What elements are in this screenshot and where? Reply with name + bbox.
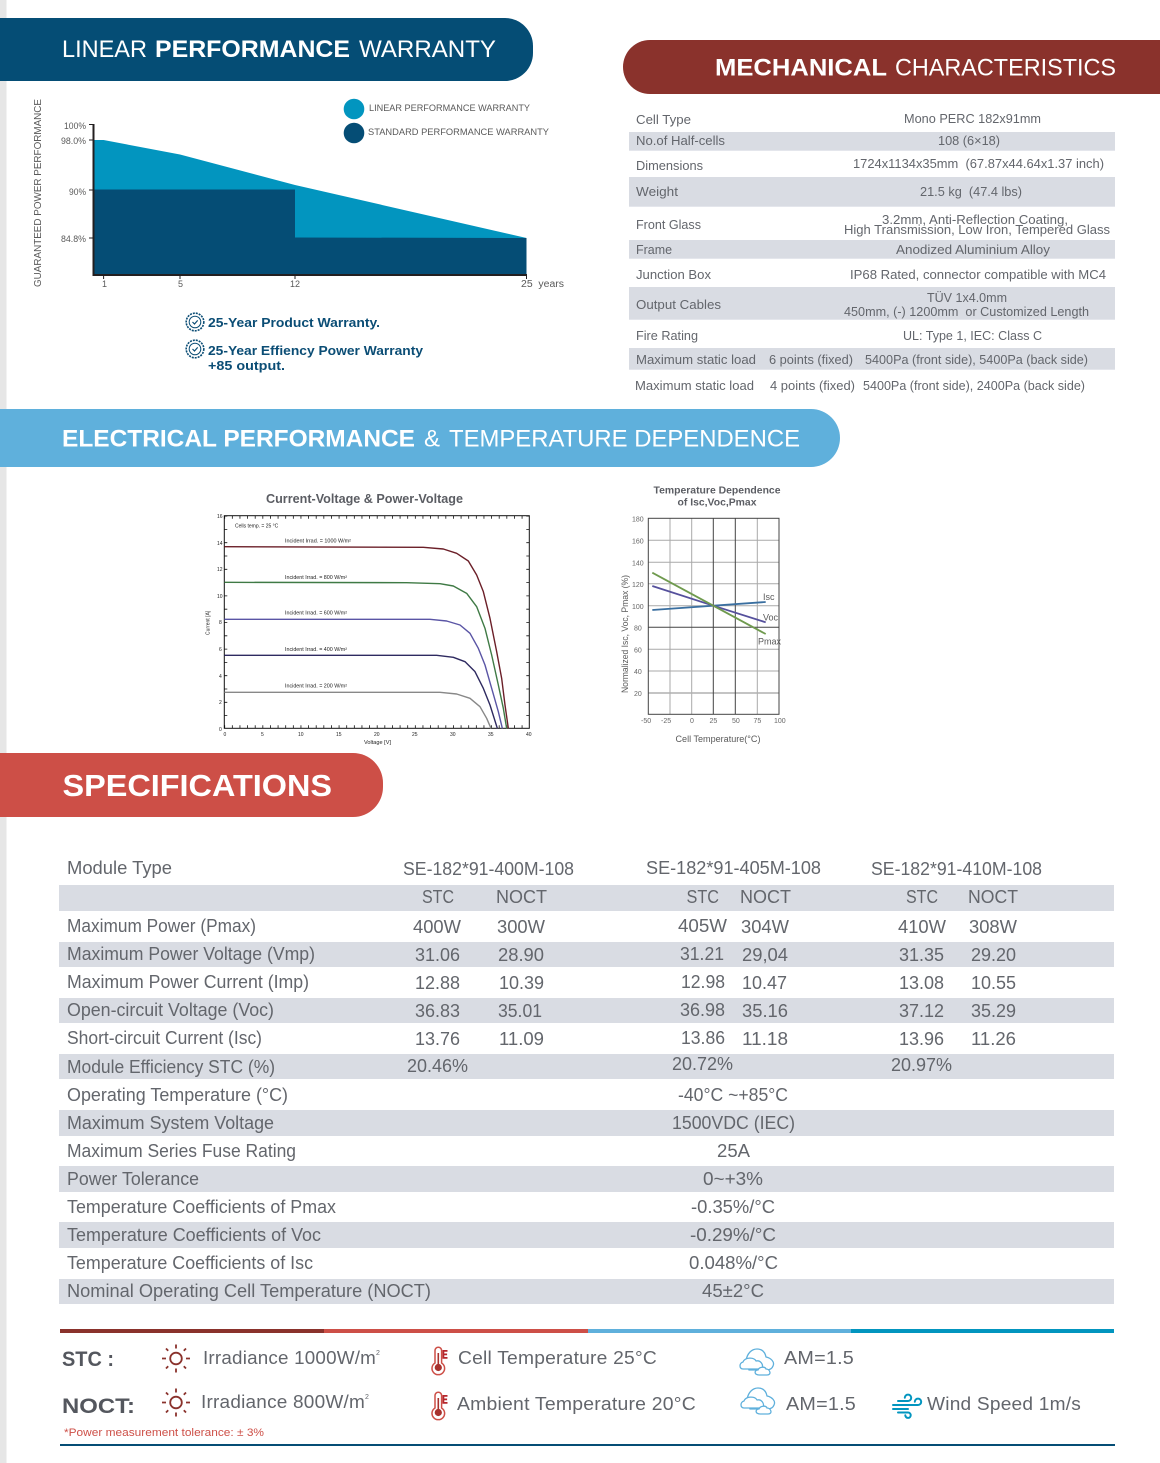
heading: electrical performance and temperature dependence: TEMPERATURE DEPENDENCE <box>449 426 800 452</box>
table: mechanical characteristics: Dimensions <box>636 158 703 173</box>
row: module efficiency: 20.72% <box>672 1054 733 1074</box>
row: short-circuit current: 13.86 <box>681 1028 725 1048</box>
chart: temperature dependence of Isc, Voc, Pmax: Voc <box>763 612 779 622</box>
row: maximum power voltage: 29.20 <box>971 945 1016 965</box>
chart: current-voltage and power-voltage curves: 35 <box>488 732 494 738</box>
row: STC and NOCT column headers: NOCT <box>968 887 1018 907</box>
row: maximum power current: 10.47 <box>742 973 787 993</box>
row: maximum power current <box>67 972 1016 993</box>
row: open-circuit voltage: 36.98 <box>680 1000 725 1020</box>
row: maximum power current: 12.88 <box>415 973 460 993</box>
chart: temperature dependence of Isc, Voc, Pmax: 80 <box>634 626 642 632</box>
chart: linear performance warranty area chart: GUARANTEED POWER PERFORMANCE <box>32 99 44 287</box>
chart: current-voltage and power-voltage curves: 30 <box>450 732 456 738</box>
heading: mechanical characteristics: CHARACTERISTICS <box>895 54 1116 82</box>
warranty notes: +85 output. <box>208 359 285 373</box>
chart: current-voltage and power-voltage curves: Incident Irrad. = 200 W/m² <box>285 684 347 690</box>
row: maximum power: Maximum Power (Pmax) <box>67 916 256 936</box>
table: mechanical characteristics: 3.2mm, Anti-Reflection Coating, <box>882 212 1068 227</box>
row: temperature coefficient of Isc: 0.048%/°C <box>689 1253 778 1273</box>
row: maximum power: 300W <box>497 917 545 937</box>
row: open-circuit voltage: 37.12 <box>899 1001 944 1021</box>
icon: cloud NOCT <box>741 1388 775 1414</box>
chart: temperature dependence of Isc, Voc, Pmax <box>620 484 786 744</box>
chart: temperature dependence of Isc, Voc, Pmax: Cell Temperature(°C) <box>676 734 760 744</box>
table: mechanical characteristics: No.of Half-cells <box>636 133 726 148</box>
chart: temperature dependence of Isc, Voc, Pmax: 140 <box>632 560 644 568</box>
row: short-circuit current: Short-circuit Current (Isc) <box>67 1028 262 1048</box>
chart: temperature dependence of Isc, Voc, Pmax: Pmax <box>758 636 782 646</box>
text: AM NOCT: AM=1.5 <box>786 1394 856 1414</box>
row: short-circuit current: 13.96 <box>899 1029 944 1049</box>
row: maximum power: 410W <box>898 917 946 937</box>
row: module type header: SE-182*91-405M-108 <box>646 858 821 878</box>
chart: linear performance warranty area chart <box>32 99 564 290</box>
chart: temperature dependence of Isc, Voc, Pmax: of Isc,Voc,Pmax <box>678 496 757 508</box>
icon: cloud STC <box>740 1349 774 1375</box>
heading: linear performance warranty: LINEAR <box>62 36 147 63</box>
chart: temperature dependence of Isc, Voc, Pmax: 60 <box>634 648 642 654</box>
warranty notes: 25-Year Effiency Power Warranty <box>208 344 423 358</box>
heading: linear performance warranty: PERFORMANCE <box>155 36 350 63</box>
row: temperature coefficient of Pmax: Temperature Coefficients of Pmax <box>67 1197 336 1217</box>
chart: current-voltage and power-voltage curves: 14 <box>217 541 223 547</box>
legend: warranty types: STANDARD PERFORMANCE WARRANTY <box>368 127 549 137</box>
row: temperature coefficient of Voc: -0.29%/°C <box>690 1225 776 1245</box>
row: maximum power current: 10.55 <box>971 973 1016 993</box>
row: maximum power voltage: 31.21 <box>680 944 724 964</box>
chart: temperature dependence of Isc, Voc, Pmax: 75 <box>754 718 761 725</box>
panel: test conditions footer <box>60 1329 1115 1446</box>
chart: current-voltage and power-voltage curves: 6 <box>219 647 222 653</box>
row: maximum power voltage: 31.06 <box>415 945 460 965</box>
chart: temperature dependence of Isc, Voc, Pmax: 50 <box>732 718 740 725</box>
legend: warranty types: LINEAR PERFORMANCE WARRANTY <box>369 103 530 113</box>
row: module efficiency: 20.46% <box>407 1056 468 1076</box>
row: module type header: SE-182*91-400M-108 <box>403 859 574 879</box>
row: STC and NOCT column headers: STC <box>422 887 454 907</box>
note: power measurement tolerance: *Power measurement tolerance: ± 3% <box>64 1427 264 1439</box>
row: nominal operating cell temperature: 45±2°C <box>702 1281 764 1301</box>
row: maximum system voltage: 1500VDC (IEC) <box>672 1113 795 1133</box>
warranty notes <box>186 313 423 373</box>
row: short-circuit current: 11.09 <box>499 1029 544 1049</box>
row: maximum power current: 12.98 <box>681 972 725 992</box>
heading: linear performance warranty <box>0 18 533 81</box>
heading: specifications <box>0 753 383 817</box>
table: mechanical characteristics: 4 points (fixed) <box>770 378 855 393</box>
table: mechanical characteristics: TÜV 1x4.0mm <box>927 290 1007 305</box>
table: mechanical characteristics: Mono PERC 182x91mm <box>904 111 1041 126</box>
chart: temperature dependence of Isc, Voc, Pmax: 180 <box>632 516 644 524</box>
chart: temperature dependence of Isc, Voc, Pmax: 20 <box>634 691 642 698</box>
row: short-circuit current: 11.26 <box>971 1029 1016 1049</box>
row: maximum system voltage: Maximum System Voltage <box>67 1113 274 1133</box>
chart: linear performance warranty area chart: 90% <box>69 187 86 197</box>
icon: sun NOCT <box>162 1388 190 1416</box>
legend: warranty types <box>344 99 549 143</box>
table: mechanical characteristics: 21.5 kg (47.4 lbs) <box>920 184 1022 199</box>
row: temperature coefficient of Pmax <box>67 1197 775 1217</box>
row: power tolerance <box>67 1169 763 1189</box>
row: maximum power: 400W <box>413 917 461 937</box>
chart: current-voltage and power-voltage curves: 2 <box>219 700 222 706</box>
table: mechanical characteristics <box>629 111 1115 393</box>
chart: current-voltage and power-voltage curves: 5 <box>261 732 264 738</box>
chart: temperature dependence of Isc, Voc, Pmax: 25 <box>710 718 717 725</box>
row: maximum power voltage: 29,04 <box>742 945 788 965</box>
heading: specifications: SPECIFICATIONS <box>62 768 332 803</box>
chart: temperature dependence of Isc, Voc, Pmax: 160 <box>632 538 644 546</box>
row: maximum series fuse rating <box>67 1141 750 1161</box>
row: open-circuit voltage: Open-circuit Voltage (Voc) <box>67 1000 274 1020</box>
row: temperature coefficient of Isc <box>67 1253 778 1273</box>
row: module type header <box>67 858 1042 879</box>
text: irradiance 800: 2 <box>365 1394 369 1401</box>
chart: current-voltage and power-voltage curves: Incident Irrad. = 800 W/m² <box>285 575 347 581</box>
chart: current-voltage and power-voltage curves: 25 <box>412 732 418 738</box>
row: maximum series fuse rating: Maximum Series Fuse Rating <box>67 1141 296 1161</box>
row: module type header: SE-182*91-410M-108 <box>871 859 1042 879</box>
table: mechanical characteristics: Output Cables <box>636 297 722 312</box>
chart: temperature dependence of Isc, Voc, Pmax: 40 <box>634 669 642 676</box>
chart: temperature dependence of Isc, Voc, Pmax: -50 <box>641 718 651 725</box>
row: maximum power current: 10.39 <box>499 973 544 993</box>
row: temperature coefficient of Voc: Temperature Coefficients of Voc <box>67 1225 321 1245</box>
heading: mechanical characteristics: MECHANICAL <box>715 54 887 82</box>
table: mechanical characteristics: 5400Pa (front side), 2400Pa (back side) <box>863 378 1085 393</box>
row: maximum power voltage: 28.90 <box>498 945 544 965</box>
chart: linear performance warranty area chart: 5 <box>178 279 183 289</box>
table: mechanical characteristics: Front Glass <box>636 217 701 232</box>
chart: linear performance warranty area chart: 12 <box>290 279 300 289</box>
table: mechanical characteristics: IP68 Rated, connector compatible with MC4 <box>850 267 1106 282</box>
row: short-circuit current <box>67 1028 1016 1049</box>
table: mechanical characteristics: Maximum static load <box>636 352 756 367</box>
heading: electrical performance and temperature dependence: & <box>424 426 440 452</box>
table: mechanical characteristics: High Transmission, Low Iron, Tempered Glass <box>844 222 1110 237</box>
table: mechanical characteristics: Weight <box>636 184 678 199</box>
chart: linear performance warranty area chart: 1 <box>102 279 107 289</box>
row: operating temperature <box>67 1085 788 1105</box>
chart: current-voltage and power-voltage curves: Current-Voltage & Power-Voltage <box>266 492 463 506</box>
row: short-circuit current: 13.76 <box>415 1029 460 1049</box>
row: temperature coefficient of Isc: Temperature Coefficients of Isc <box>67 1253 313 1273</box>
table: mechanical characteristics: 450mm, (-) 1200mm or Customized Length <box>844 304 1089 319</box>
chart: current-voltage and power-voltage curves: 10 <box>298 732 304 738</box>
table: mechanical characteristics: 1724x1134x35mm (67.87x44.64x1.37 inch) <box>853 156 1104 171</box>
chart: current-voltage and power-voltage curves: 10 <box>217 594 223 600</box>
chart: current-voltage and power-voltage curves: Voltage [V] <box>364 740 392 746</box>
row: power tolerance: Power Tolerance <box>67 1169 199 1189</box>
chart: current-voltage and power-voltage curves: 12 <box>217 567 223 573</box>
row: STC and NOCT column headers: STC <box>686 887 719 907</box>
row: STC and NOCT column headers: NOCT <box>740 887 791 907</box>
table: mechanical characteristics: UL: Type 1, IEC: Class C <box>903 328 1042 343</box>
table: mechanical characteristics: Anodized Aluminium Alloy <box>896 242 1051 257</box>
chart: temperature dependence of Isc, Voc, Pmax: Normalized Isc, Voc, Pmax (%) <box>620 575 630 693</box>
row: operating temperature: -40°C ~+85°C <box>678 1085 788 1105</box>
row: maximum power current: Maximum Power Current (Imp) <box>67 972 309 992</box>
row: maximum power: 304W <box>741 917 789 937</box>
heading: linear performance warranty: WARRANTY <box>359 36 496 63</box>
table: mechanical characteristics: Frame <box>636 242 672 257</box>
row: maximum power voltage: Maximum Power Voltage (Vmp) <box>67 944 315 964</box>
row: open-circuit voltage: 35.01 <box>498 1001 542 1021</box>
label: STC: STC : <box>62 1348 114 1371</box>
chart: current-voltage and power-voltage curves: 20 <box>374 732 380 738</box>
icon: thermometer STC <box>432 1347 448 1375</box>
text: cell temperature: Cell Temperature 25°C <box>458 1348 657 1368</box>
text: irradiance 800: Irradiance 800W/m <box>201 1392 365 1412</box>
heading: electrical performance and temperature dependence: ELECTRICAL PERFORMANCE <box>62 426 415 452</box>
chart: temperature dependence of Isc, Voc, Pmax: -25 <box>661 718 671 725</box>
row: temperature coefficient of Pmax: -0.35%/°C <box>691 1197 775 1217</box>
row: operating temperature: Operating Temperature (°C) <box>67 1085 288 1105</box>
heading: electrical performance and temperature dependence <box>0 409 840 467</box>
row: power tolerance: 0~+3% <box>703 1169 763 1189</box>
table: mechanical characteristics: 5400Pa (front side), 5400Pa (back side) <box>865 352 1088 367</box>
row: STC and NOCT column headers: NOCT <box>496 887 547 907</box>
row: maximum power voltage <box>67 944 1016 965</box>
row: module efficiency: 20.97% <box>891 1055 952 1075</box>
row: maximum system voltage <box>67 1113 795 1133</box>
chart: current-voltage and power-voltage curves: 8 <box>219 620 222 626</box>
chart: temperature dependence of Isc, Voc, Pmax: 120 <box>632 582 644 589</box>
row: maximum power: 308W <box>969 917 1017 937</box>
text: irradiance 1000: 2 <box>376 1350 380 1357</box>
chart: linear performance warranty area chart: 84.8% <box>61 234 86 244</box>
chart: current-voltage and power-voltage curves <box>206 492 532 746</box>
row: open-circuit voltage <box>67 1000 1016 1021</box>
table: mechanical characteristics: 108 (6×18) <box>938 133 1000 148</box>
warranty notes: 25-Year Product Warranty. <box>208 316 380 330</box>
chart: current-voltage and power-voltage curves: Current [A] <box>206 610 212 635</box>
chart: current-voltage and power-voltage curves: 0 <box>224 732 226 738</box>
text: AM STC: AM=1.5 <box>784 1348 854 1368</box>
chart: current-voltage and power-voltage curves: Incident Irrad. = 600 W/m² <box>285 610 347 616</box>
row: nominal operating cell temperature <box>67 1281 764 1301</box>
text: wind speed: Wind Speed 1m/s <box>927 1394 1081 1414</box>
table: mechanical characteristics: 6 points (fixed) <box>769 352 853 367</box>
row: module efficiency: Module Efficiency STC (%) <box>67 1057 275 1077</box>
table: mechanical characteristics: Fire Rating <box>636 328 698 343</box>
row: nominal operating cell temperature: Nominal Operating Cell Temperature (NOCT) <box>67 1281 431 1301</box>
chart: temperature dependence of Isc, Voc, Pmax: Temperature Dependence <box>654 484 781 496</box>
table: mechanical characteristics: Cell Type <box>636 112 691 127</box>
chart: linear performance warranty area chart: 25 years <box>521 279 564 290</box>
row: open-circuit voltage: 35.16 <box>742 1001 788 1021</box>
row: open-circuit voltage: 36.83 <box>415 1001 460 1021</box>
table: specifications <box>59 858 1114 1304</box>
chart: current-voltage and power-voltage curves: 4 <box>219 674 222 680</box>
table: mechanical characteristics: Maximum static load <box>635 378 754 393</box>
row: module type header: Module Type <box>67 858 172 878</box>
chart: temperature dependence of Isc, Voc, Pmax: 0 <box>690 718 694 725</box>
row: temperature coefficient of Voc <box>67 1225 776 1245</box>
chart: current-voltage and power-voltage curves: 0 <box>219 727 222 733</box>
row: maximum power current: 13.08 <box>899 973 944 993</box>
icon: wind <box>893 1395 921 1418</box>
row: short-circuit current: 11.18 <box>742 1029 788 1049</box>
text: ambient temperature: Ambient Temperature 20°C <box>457 1394 696 1414</box>
icon: sun STC <box>162 1344 190 1372</box>
chart: linear performance warranty area chart: 100% <box>64 121 86 131</box>
row: maximum power voltage: 31.35 <box>899 945 944 965</box>
row: module efficiency <box>67 1054 952 1077</box>
chart: temperature dependence of Isc, Voc, Pmax: 100 <box>632 604 644 611</box>
label: NOCT: NOCT: <box>62 1395 135 1418</box>
row: STC and NOCT column headers: STC <box>906 887 938 907</box>
row: maximum power <box>67 916 1017 937</box>
chart: current-voltage and power-voltage curves: 40 <box>526 732 532 738</box>
chart: temperature dependence of Isc, Voc, Pmax: 100 <box>774 718 786 725</box>
chart: current-voltage and power-voltage curves: Incident Irrad. = 1000 W/m² <box>285 538 351 544</box>
chart: current-voltage and power-voltage curves: 15 <box>336 732 342 738</box>
row: maximum power: 405W <box>678 916 727 936</box>
icon: thermometer NOCT <box>432 1392 448 1420</box>
text: irradiance 1000: Irradiance 1000W/m <box>203 1348 376 1368</box>
chart: current-voltage and power-voltage curves: 16 <box>217 514 223 520</box>
chart: linear performance warranty area chart: 98.0% <box>61 136 86 146</box>
row: maximum series fuse rating: 25A <box>717 1141 750 1161</box>
chart: current-voltage and power-voltage curves: Incident Irrad. = 400 W/m² <box>285 647 347 653</box>
row: open-circuit voltage: 35.29 <box>971 1001 1016 1021</box>
row: STC and NOCT column headers <box>422 887 1018 907</box>
chart: temperature dependence of Isc, Voc, Pmax: Isc <box>763 592 775 602</box>
table: mechanical characteristics: Junction Box <box>636 267 711 282</box>
heading: mechanical characteristics <box>623 40 1160 94</box>
chart: current-voltage and power-voltage curves: Cells temp. = 25 °C <box>235 524 279 530</box>
